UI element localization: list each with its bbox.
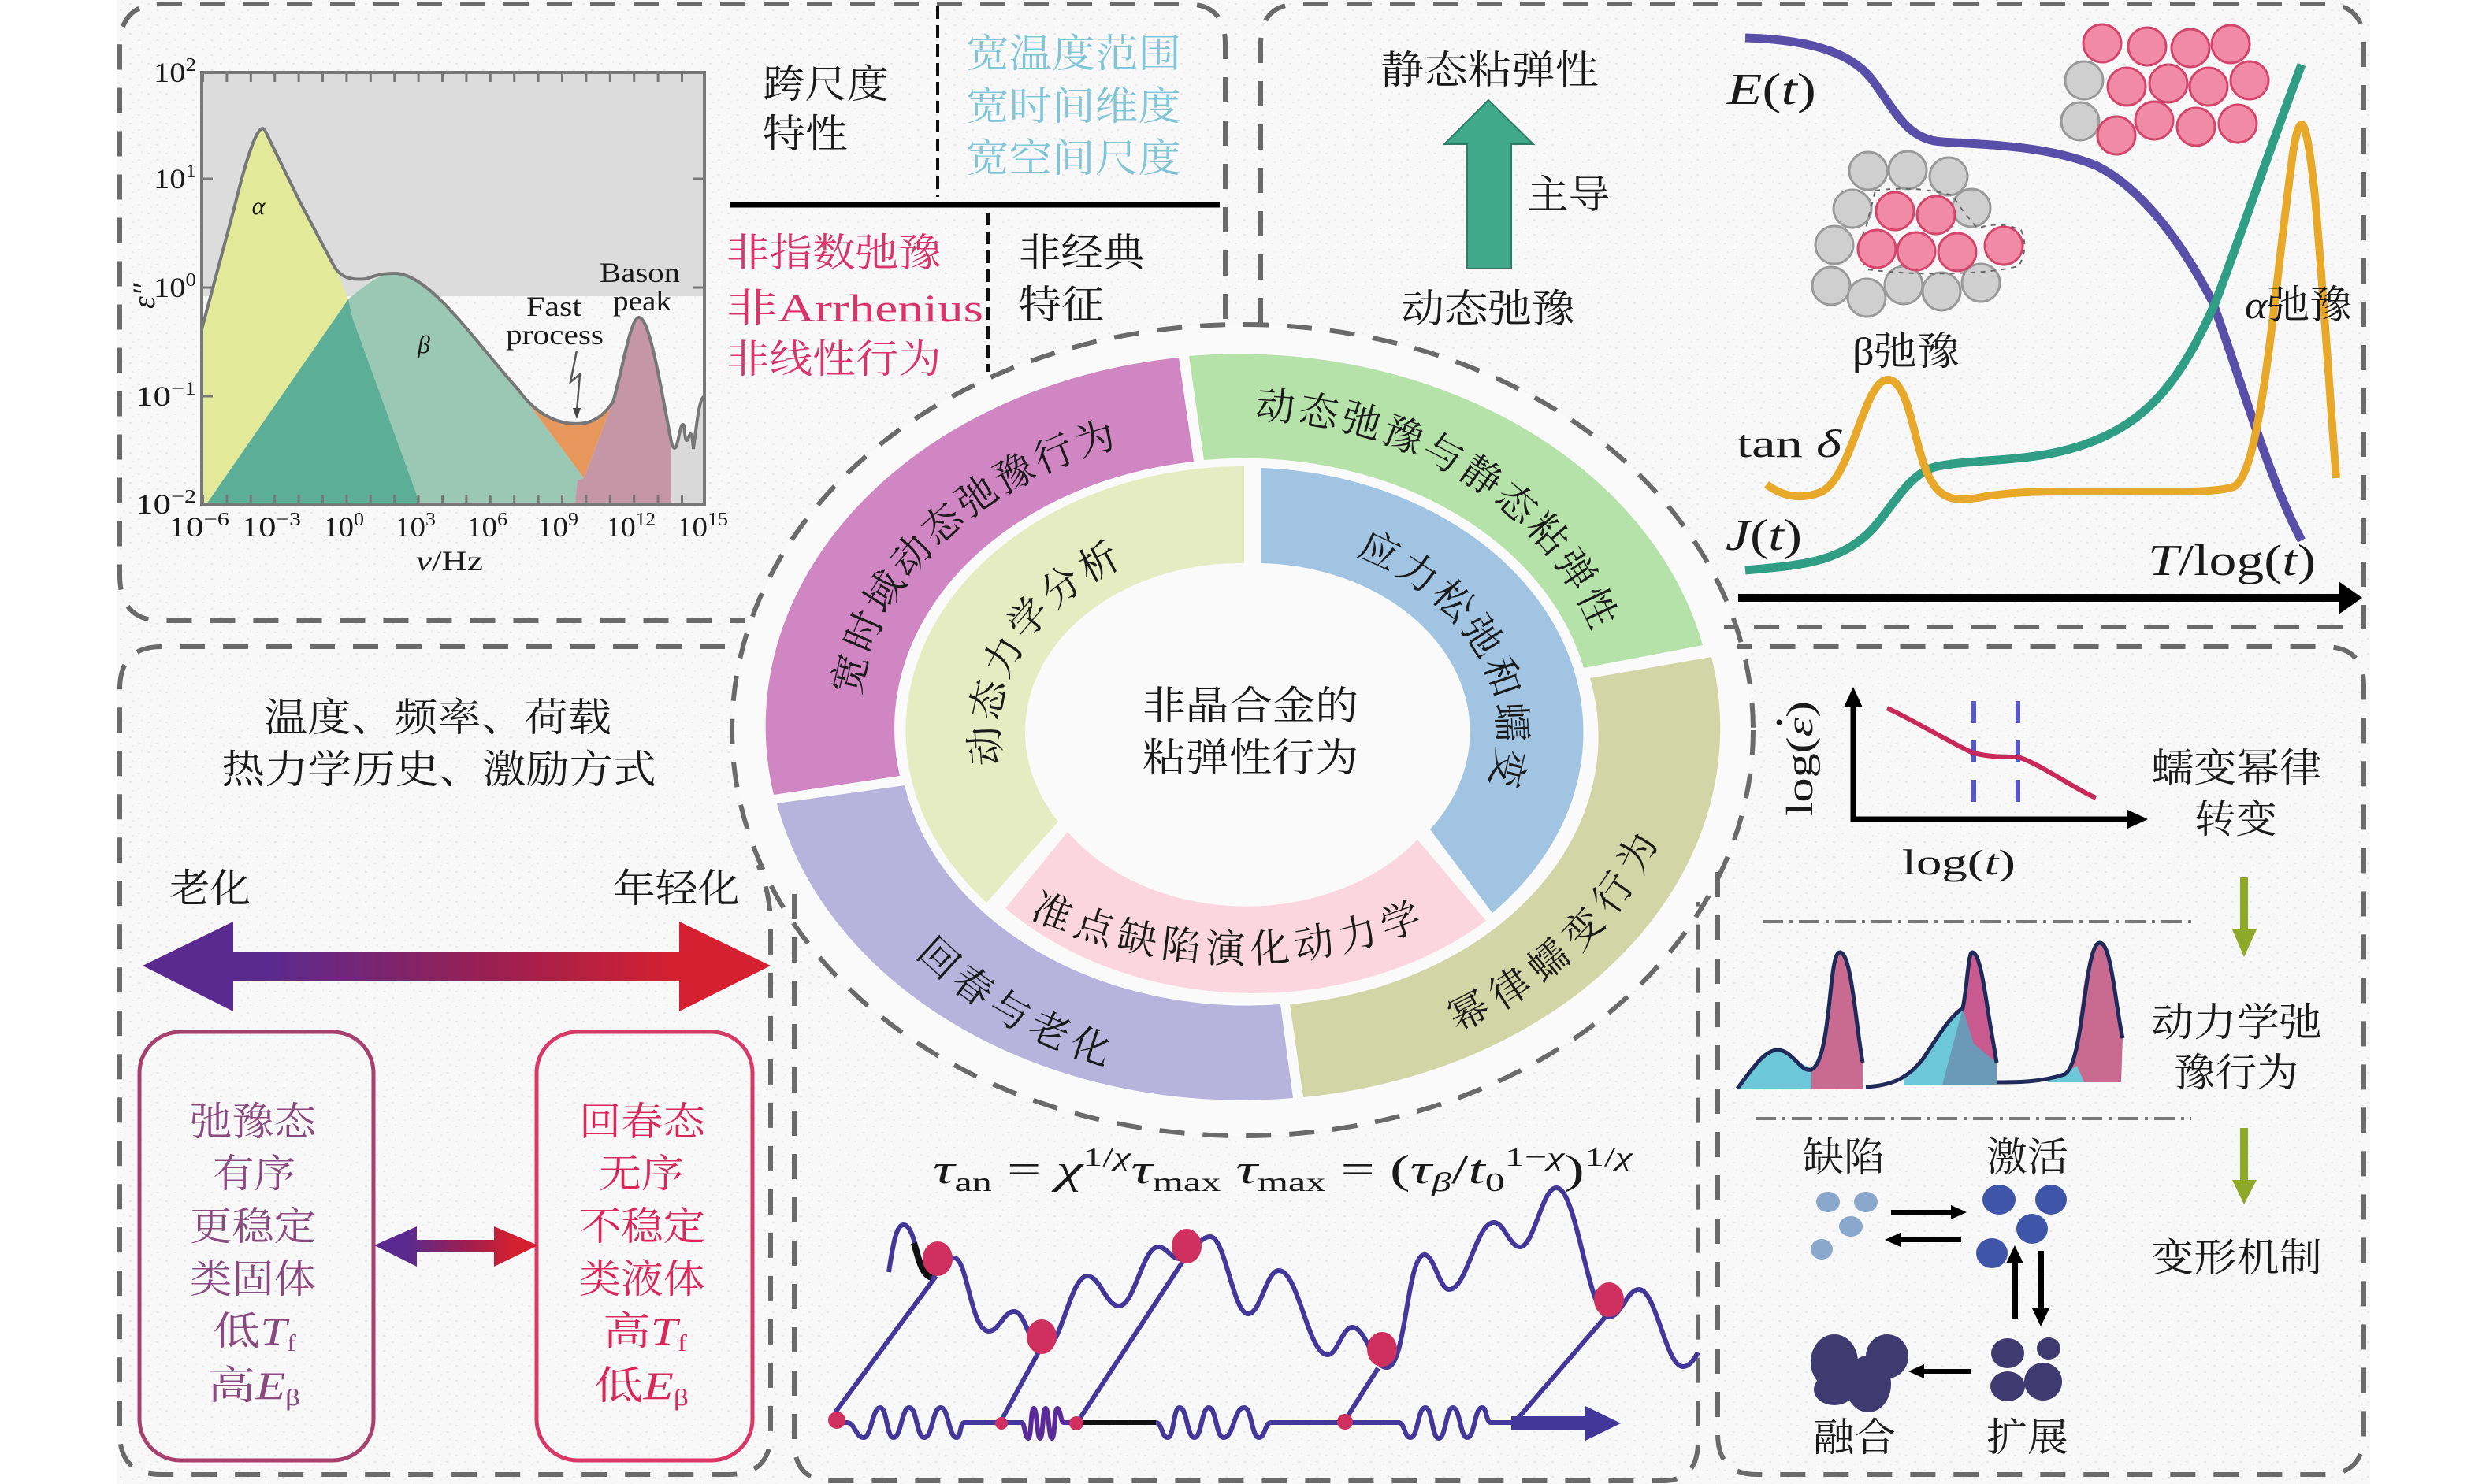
x axis labels: 10 <box>466 511 495 543</box>
ring segment: dynamic relaxation and static viscoelasticity: 动态弛豫与静态粘弹性 <box>1257 388 1618 631</box>
text: influencing factors <box>221 696 656 792</box>
x axis labels: −6 <box>204 510 229 530</box>
x axis labels: 10 <box>395 511 423 543</box>
icon: atoms for beta relaxation <box>1812 151 2024 317</box>
box: relaxed state <box>139 1032 373 1460</box>
ring segment: dynamic mechanical analysis <box>906 466 1244 903</box>
diagram: defect evolution: 融合 <box>1813 1415 1896 1460</box>
text: creep power-law transition: 蠕变幂律 <box>2151 746 2322 790</box>
formula: χ <box>1110 1143 1132 1172</box>
text block: cross-scale characteristics: 特性 <box>763 112 848 156</box>
icon: defects <box>1811 1192 1878 1260</box>
center title: 粘弹性行为 <box>1143 736 1358 780</box>
ring segment: quasi-point defect dynamics: 准点缺陷演化动力学 <box>1033 889 1419 966</box>
curve labels: T/log( t) <box>2148 536 2316 585</box>
arrow: temperature or time axis <box>1738 581 2362 614</box>
x axis labels: 9 <box>568 510 578 530</box>
icon: merged <box>1811 1334 1908 1412</box>
x axis labels: 10 <box>323 511 351 543</box>
text block: non-classical features: 非指数弛豫 <box>726 231 942 275</box>
text: influencing factors: 温度、频率、荷载 <box>264 696 611 740</box>
box: rejuvenated state: 高T <box>603 1309 673 1353</box>
text block: non-classical features: 非Arrhenius <box>726 286 983 330</box>
curve: E(t) <box>1745 38 2302 540</box>
ring segment: stress relaxation and creep: 应力松弛和蠕变 <box>1355 532 1532 788</box>
formula: 0 <box>1485 1168 1505 1197</box>
curve labels: J(t) <box>1726 511 1802 560</box>
panel: bottom-right creep and deformation mechanism <box>1718 647 2364 1475</box>
y axis labels <box>136 55 196 520</box>
curve: tan delta <box>1767 124 2336 499</box>
box: rejuvenated state <box>537 1032 752 1460</box>
ring segment: power law creep <box>1290 657 1721 1097</box>
icon: expansion <box>1990 1337 2062 1401</box>
y axis labels: 2 <box>186 55 196 76</box>
ring segment: rejuvenation and aging: 回春与老化 <box>916 934 1109 1067</box>
text block: cross-scale characteristics: 宽空间尺度 <box>966 136 1181 180</box>
box: relaxed state: 类固体 <box>190 1257 316 1301</box>
box: relaxed state: 高E <box>207 1363 280 1408</box>
x axis labels: 3 <box>425 510 436 530</box>
x axis labels: 0 <box>354 510 364 530</box>
text block: non-classical features: 非线性行为 <box>726 337 942 381</box>
box: relaxed state: 更稳定 <box>190 1204 316 1248</box>
text: dynamic relaxation behavior: 动力学弛 <box>2151 1000 2322 1044</box>
box: relaxed state: β <box>285 1385 300 1411</box>
y axis labels: 10 <box>154 163 182 195</box>
text: dominant: 主导 <box>1527 173 1610 217</box>
text block: non-classical features <box>726 213 1147 381</box>
chart: relaxation spectra <box>1737 943 2123 1089</box>
text block: cross-scale characteristics <box>763 6 1181 197</box>
formula: τ <box>1221 1148 1260 1193</box>
box: relaxed state: f <box>287 1330 296 1356</box>
chart: creep power-law transition <box>1776 687 2148 882</box>
icon: activated <box>1976 1185 2067 1268</box>
x axis labels: −3 <box>276 510 301 530</box>
formula: β <box>1431 1168 1451 1197</box>
chart: loss spectrum: ε″ <box>126 282 162 309</box>
y axis labels: 10 <box>154 57 182 88</box>
y axis labels: −2 <box>171 487 196 507</box>
formula: χ <box>1544 1143 1566 1172</box>
x axis labels: 10 <box>537 511 566 543</box>
text block: cross-scale characteristics: 跨尺度 <box>763 62 889 106</box>
arrow: reversible state change <box>374 1226 538 1267</box>
diagram: defect evolution: 激活 <box>1986 1135 2068 1179</box>
ring segment: power law creep: 幂律蠕变行为 <box>1447 833 1656 1030</box>
ring segment: dynamic relaxation and static viscoelasticity <box>1189 354 1703 668</box>
formula: ) <box>1564 1148 1585 1193</box>
curve: potential energy landscape <box>889 1188 1698 1367</box>
curve labels <box>1726 65 2316 585</box>
chart: creep power-law transition: log(ε) <box>1779 701 1821 816</box>
formula: = ( <box>1325 1148 1410 1193</box>
box: relaxed state: 低T <box>213 1309 282 1353</box>
box: rejuvenated state: f <box>678 1330 687 1356</box>
ring segment: wide time-domain dynamic relaxation <box>766 358 1194 795</box>
chart: loss spectrum <box>126 55 728 577</box>
ring segment: dynamic mechanical analysis: 动态力学分析 <box>966 539 1117 765</box>
arrow: fast process <box>570 351 581 419</box>
markers: atom positions <box>828 1229 1624 1430</box>
diagram: defect evolution: 缺陷 <box>1803 1135 1885 1179</box>
diagram: defect evolution <box>1803 1135 2068 1460</box>
x axis labels: 6 <box>497 510 507 530</box>
spring chain <box>837 1408 1511 1438</box>
text block: non-classical features: 特征 <box>1019 283 1104 327</box>
panel: bottom-center energy landscape <box>794 894 1698 1481</box>
box: rejuvenated state: β <box>674 1385 689 1411</box>
center title: 非晶合金的 <box>1143 684 1358 728</box>
box: relaxed state: 有序 <box>213 1152 295 1196</box>
box: relaxed state: 弛豫态 <box>190 1100 317 1144</box>
text: static viscoelasticity: 静态粘弹性 <box>1380 48 1599 92</box>
box: rejuvenated state: 回春态 <box>579 1100 706 1144</box>
arrow: down 1 <box>2232 877 2257 957</box>
arrow: down 2 <box>2232 1128 2257 1204</box>
ring segment: rejuvenation and aging <box>777 785 1293 1100</box>
text: deformation mechanism: 变形机制 <box>2151 1236 2322 1280</box>
x axis labels <box>168 510 728 543</box>
x axis labels: 12 <box>636 510 656 530</box>
arrow: aging to rejuvenation <box>143 922 771 1011</box>
peak labels: Bason <box>600 257 680 288</box>
ring segment: stress relaxation and creep <box>1261 468 1584 913</box>
panel: top-left cross-scale spectrum <box>120 4 1225 621</box>
box: rejuvenated state: 低 E <box>594 1363 667 1408</box>
formula: τ <box>933 1148 957 1193</box>
formula: τ <box>1410 1148 1435 1193</box>
x axis labels: 10 <box>606 511 634 543</box>
peak labels: peak <box>613 285 671 317</box>
arrow: chain direction <box>1511 1406 1621 1441</box>
ring segment: wide time-domain dynamic relaxation: 宽时域动态弛豫行为 <box>830 420 1112 695</box>
peak labels: α <box>252 191 266 220</box>
arrow: dominates <box>1444 100 1533 269</box>
curve: J(t) <box>1745 65 2302 570</box>
text: dynamic relaxation: 动态弛豫 <box>1401 287 1575 331</box>
panel: top-right dynamic relaxation and static viscoelasticity <box>1261 4 2364 627</box>
x axis labels: 10 <box>168 511 196 543</box>
black segment under first ball <box>914 1243 931 1278</box>
formula: max <box>1153 1168 1221 1197</box>
panel: bottom-left aging and rejuvenation <box>120 647 771 1475</box>
axis titles: v/Hz <box>416 545 483 577</box>
box: rejuvenated state: 不稳定 <box>579 1204 705 1248</box>
formula: 1/ <box>1585 1143 1616 1172</box>
y axis labels: 0 <box>186 270 196 291</box>
y axis labels: 10 <box>154 272 182 303</box>
text: rejuvenation: 年轻化 <box>613 866 740 911</box>
text: dynamic relaxation behavior <box>2151 1000 2322 1095</box>
text: creep power-law transition: 转变 <box>2194 797 2277 841</box>
x axis labels: 15 <box>708 510 728 530</box>
x axis labels: 10 <box>677 511 705 543</box>
formula: / <box>1451 1148 1469 1193</box>
text block: cross-scale characteristics: 宽时间维度 <box>966 84 1181 128</box>
text block: non-classical features: 非经典 <box>1019 231 1147 275</box>
formula: 1/ <box>1083 1143 1114 1172</box>
y axis labels: 1 <box>186 161 196 182</box>
text block: cross-scale characteristics: 宽温度范围 <box>966 32 1181 76</box>
ring segment: quasi-point defect dynamics <box>1005 832 1486 993</box>
text: beta relaxation: β弛豫 <box>1852 329 1960 373</box>
formula: = <box>992 1148 1056 1193</box>
y axis labels: 10 <box>136 488 164 520</box>
formula: χ <box>1611 1143 1634 1172</box>
formula: 1− <box>1505 1143 1547 1172</box>
formula: χ <box>1050 1148 1084 1193</box>
y axis labels: 10 <box>136 380 164 412</box>
y axis labels: −1 <box>171 379 196 399</box>
box: rejuvenated state: 无序 <box>599 1152 684 1196</box>
formula: t <box>1468 1148 1487 1193</box>
formula: max <box>1258 1168 1325 1197</box>
chart: creep power-law transition: log( t) <box>1902 842 2016 882</box>
formula: τ <box>1131 1148 1155 1193</box>
curve labels: tan δ <box>1737 421 1842 466</box>
formula: an <box>954 1168 992 1197</box>
icon: atoms for alpha relaxation <box>2061 24 2268 154</box>
text: dynamic relaxation behavior: 豫行为 <box>2174 1051 2298 1095</box>
arrows: defect transitions <box>1885 1205 2049 1378</box>
x axis labels: 10 <box>241 511 269 543</box>
center title <box>1143 684 1358 780</box>
box: rejuvenated state: 类液体 <box>579 1257 705 1301</box>
text: aging: 老化 <box>169 866 251 911</box>
curve labels: E(t) <box>1726 65 1816 114</box>
straight jump lines <box>835 1258 1607 1420</box>
text: influencing factors: 热力学历史、激励方式 <box>221 748 656 792</box>
peak labels <box>252 191 680 358</box>
text: creep power-law transition <box>2151 746 2322 841</box>
peak labels: β <box>417 330 430 358</box>
peak labels: process <box>506 319 604 351</box>
panel: central ring diagram <box>730 322 1756 1138</box>
peak labels: Fast <box>526 291 581 322</box>
diagram: defect evolution: 扩展 <box>1986 1415 2068 1460</box>
text: alpha relaxation: α弛豫 <box>2245 283 2352 327</box>
